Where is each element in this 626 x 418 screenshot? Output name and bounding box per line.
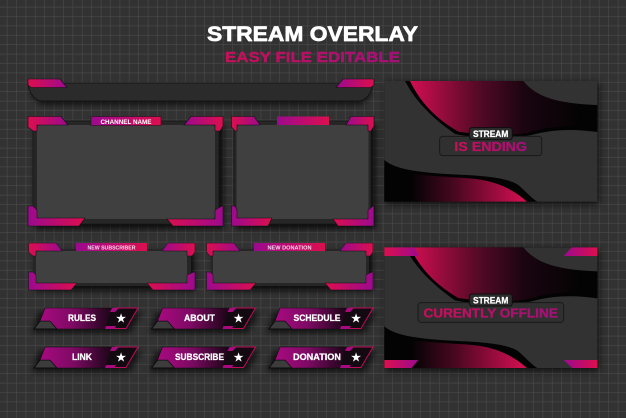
panel: new donation alert bbox=[206, 243, 373, 291]
corner tab bottom right bbox=[564, 360, 597, 368]
button: subscribe: SUBSCRIBE bbox=[175, 352, 224, 362]
panel: stream is ending screen bbox=[384, 81, 599, 204]
button: about: ABOUT bbox=[184, 313, 215, 323]
panel: top banner bar bbox=[28, 79, 374, 105]
corner tab bottom left bbox=[384, 360, 418, 368]
button: subscribe: ★ bbox=[234, 352, 244, 364]
alert screen bbox=[213, 251, 366, 283]
panel: stream currently offline screen bbox=[384, 247, 599, 370]
bottom right bracket bbox=[325, 272, 373, 290]
panel: new subscriber alert bbox=[28, 243, 195, 291]
corner tab top right bbox=[564, 247, 597, 256]
top right tab bbox=[162, 243, 195, 256]
subtitle: EASY FILE EDITABLE bbox=[225, 49, 400, 66]
banner left tab bbox=[28, 79, 67, 88]
screen area bbox=[37, 125, 215, 219]
button: rules: ★ bbox=[116, 313, 126, 325]
new donation label bbox=[254, 243, 325, 252]
button: link bbox=[32, 347, 142, 372]
bottom left bracket bbox=[232, 206, 272, 226]
panel: main webcam frame bbox=[28, 116, 224, 229]
button: schedule: SCHEDULE bbox=[294, 313, 340, 323]
bottom left bracket bbox=[206, 272, 256, 290]
is ending message box: IS ENDING bbox=[454, 139, 527, 154]
button: rules bbox=[32, 308, 142, 333]
panel: secondary webcam frame bbox=[232, 116, 376, 229]
offline message box: CURENTLY OFFLINE bbox=[423, 306, 558, 320]
button: donation: ★ bbox=[351, 352, 361, 364]
new donation label: NEW DONATION bbox=[268, 246, 312, 252]
channel name label: CHANNEL NAME bbox=[100, 119, 152, 126]
offline message box bbox=[418, 303, 564, 322]
button: schedule: ★ bbox=[351, 313, 361, 325]
top left tab bbox=[28, 116, 68, 131]
screen area bbox=[236, 125, 368, 219]
new subscriber label: NEW SUBSCRIBER bbox=[88, 246, 136, 252]
button: about: ★ bbox=[234, 313, 244, 325]
channel name label bbox=[91, 116, 161, 126]
title: STREAM OVERLAY bbox=[207, 23, 418, 46]
button: link: LINK bbox=[72, 352, 92, 362]
top left tab bbox=[206, 243, 240, 256]
is ending message box bbox=[440, 136, 542, 156]
new subscriber label bbox=[76, 243, 147, 252]
corner tab top left bbox=[384, 247, 419, 256]
button: donation: DONATION bbox=[293, 352, 341, 362]
button: schedule bbox=[267, 308, 377, 333]
bottom right bracket bbox=[333, 206, 374, 226]
top centre tab bbox=[277, 116, 329, 125]
button: link: ★ bbox=[116, 352, 126, 364]
alert screen bbox=[36, 251, 187, 283]
top right tab bbox=[340, 243, 373, 256]
top right tab bbox=[346, 116, 374, 131]
top left tab bbox=[232, 116, 260, 131]
stream label: STREAM bbox=[473, 295, 508, 305]
button: donation bbox=[267, 347, 377, 372]
button: subscribe bbox=[150, 347, 260, 372]
button: about bbox=[150, 308, 260, 333]
top left tab bbox=[28, 243, 62, 256]
bottom left bracket bbox=[28, 272, 77, 290]
bottom right bracket bbox=[147, 272, 195, 290]
banner right tab bbox=[336, 79, 374, 88]
stream label: STREAM bbox=[473, 129, 508, 139]
button: rules: RULES bbox=[68, 313, 96, 323]
top right tab bbox=[184, 116, 223, 131]
bottom left bracket bbox=[28, 206, 85, 226]
bottom right bracket bbox=[167, 206, 223, 226]
